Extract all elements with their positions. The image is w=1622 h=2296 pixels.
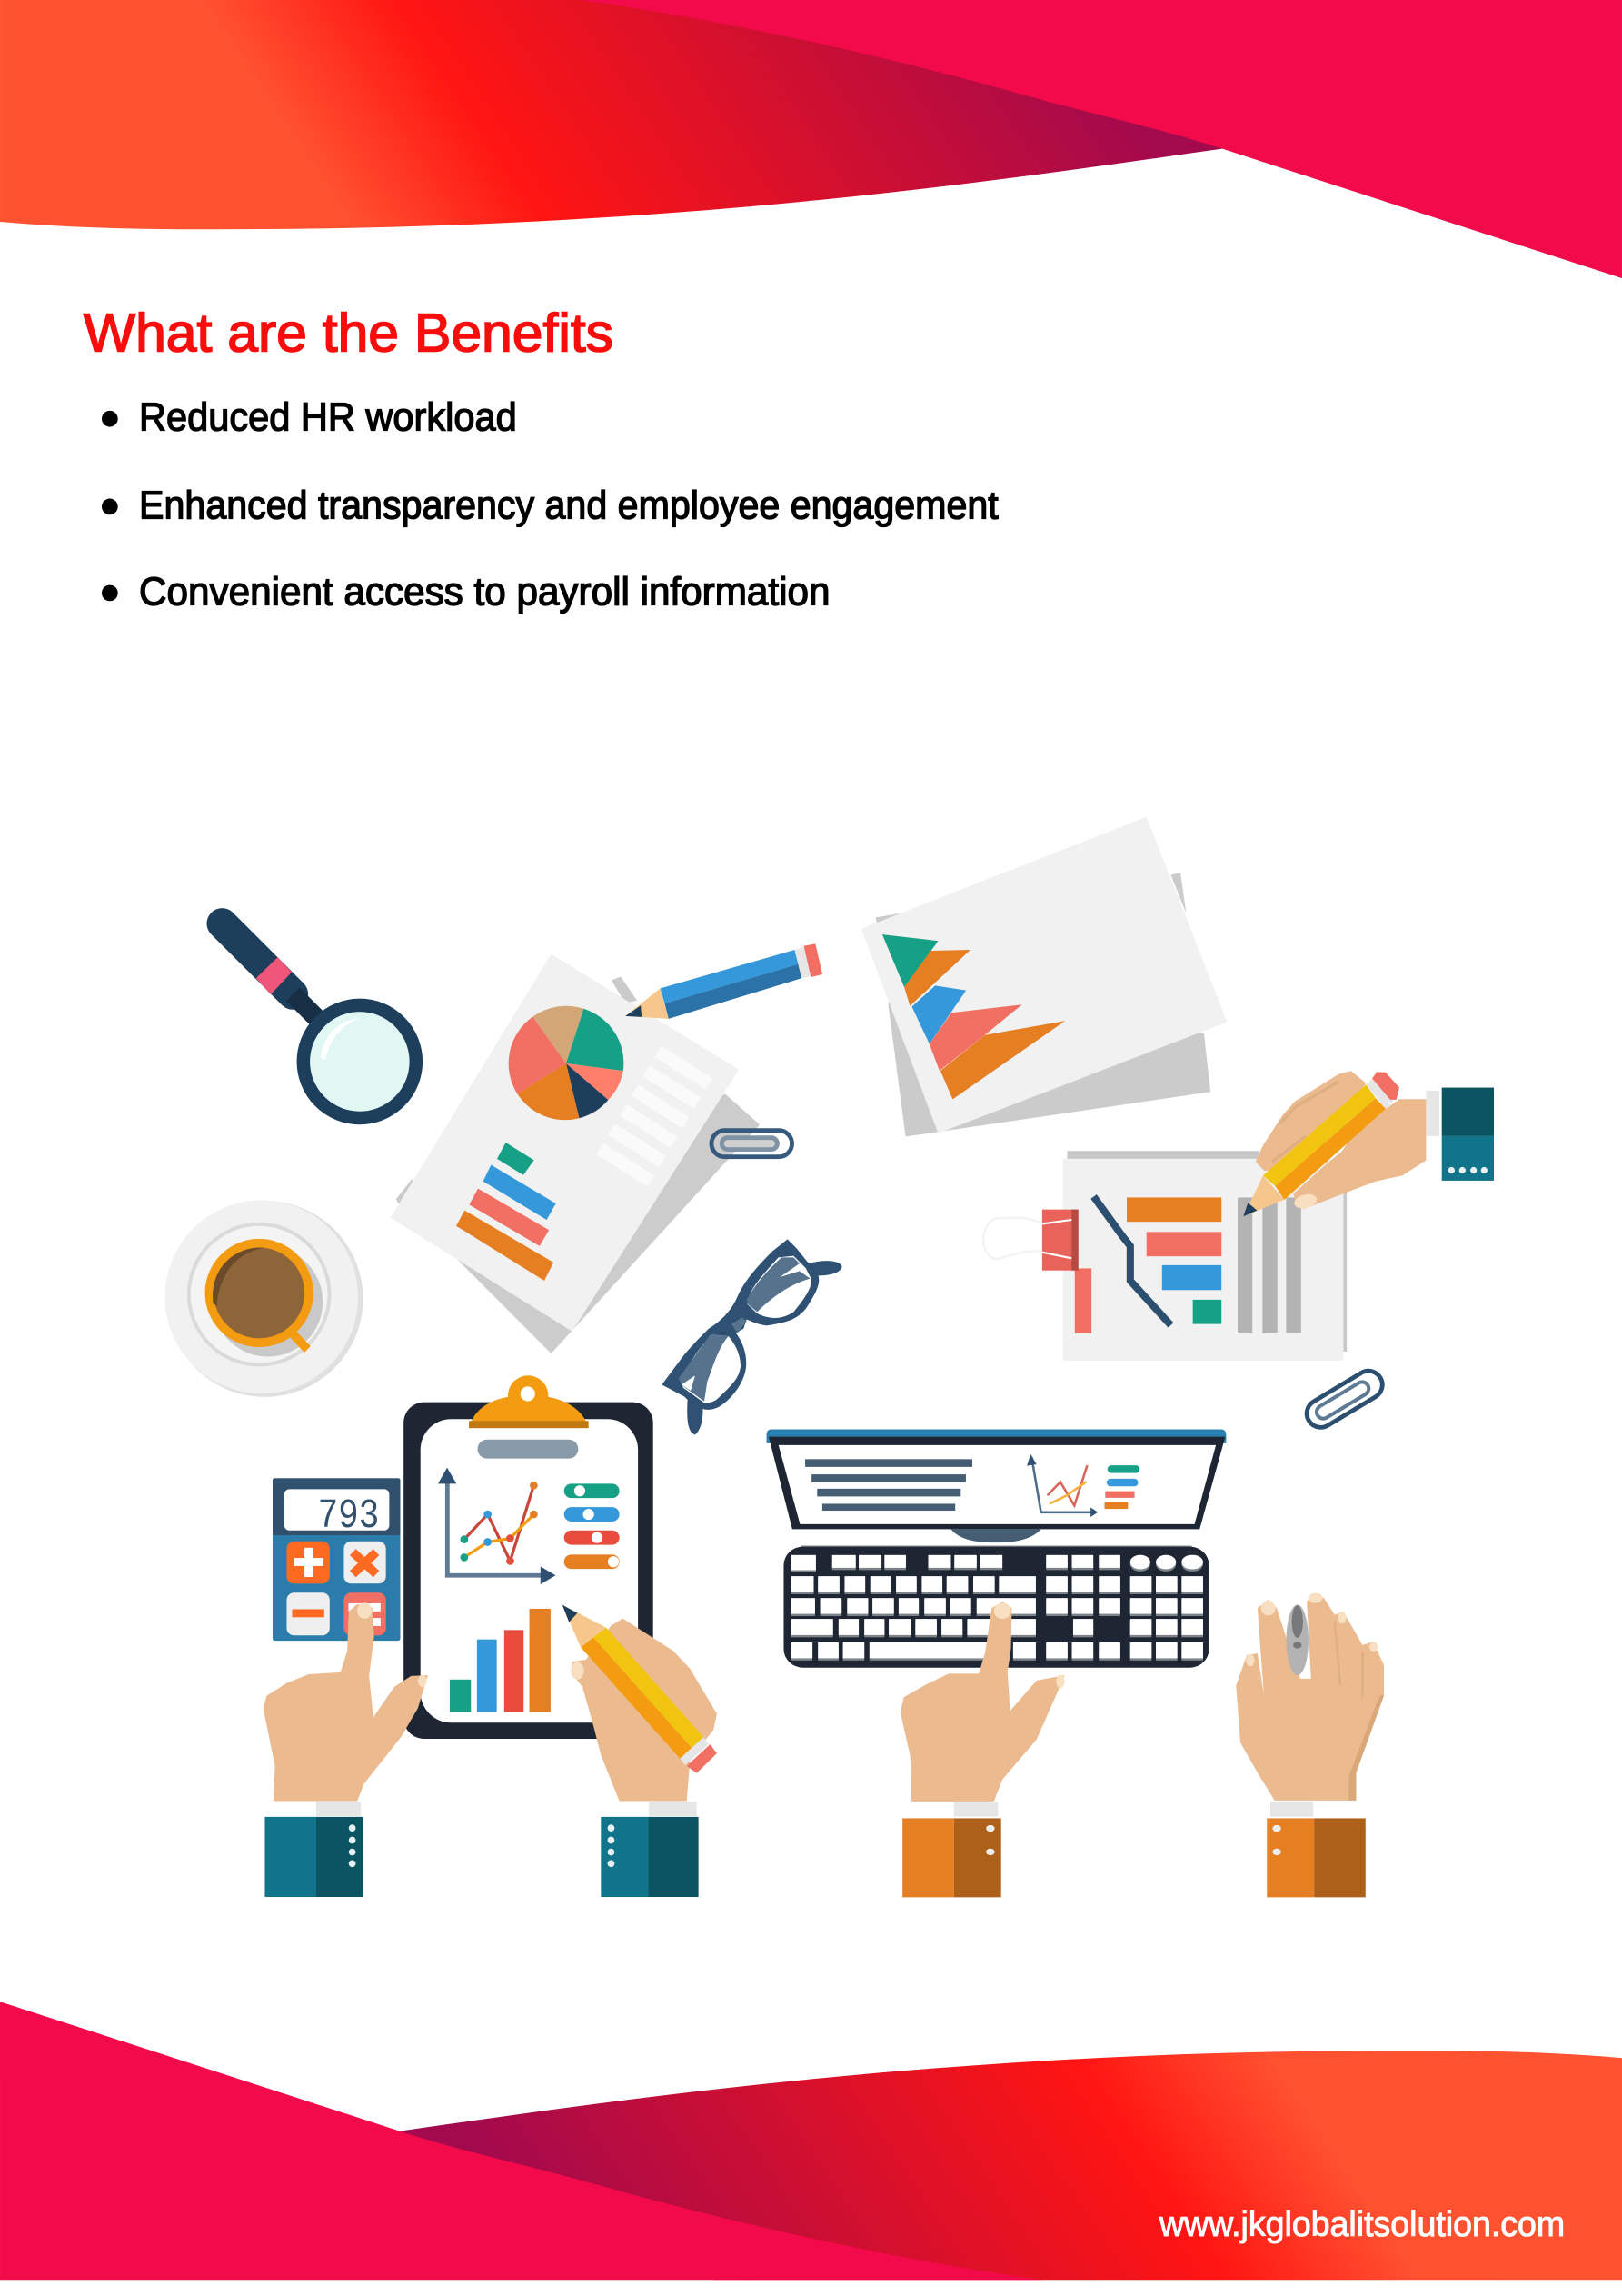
- bar stack: [456, 1143, 556, 1281]
- icon: coffee cup on saucer: [164, 1201, 363, 1397]
- text strips: [600, 1052, 709, 1182]
- paper with pie chart: [391, 954, 760, 1353]
- mouse hand: [1236, 1593, 1384, 1897]
- triangle chart: [882, 934, 1065, 1099]
- icon: blue pencil: [625, 943, 822, 1019]
- plus button: [286, 1542, 330, 1583]
- horizontal bars: [1127, 1197, 1221, 1324]
- right hand with pencil on clipboard: [562, 1605, 717, 1897]
- bullet 3: Convenient access to payroll information: [139, 570, 830, 614]
- binder clip: [983, 1210, 1091, 1333]
- paper with triangle chart: [861, 817, 1227, 1136]
- icon: glasses: [662, 1239, 842, 1434]
- left hand pressing calculator: [264, 1602, 428, 1897]
- heading: What are the Benefits: [84, 303, 613, 364]
- monitor: [767, 1429, 1226, 1542]
- keyboard and bottom right hands, zoom-space group: [783, 1545, 1384, 1897]
- screen text lines: [805, 1459, 972, 1511]
- icon: diagonal paperclip: [1301, 1366, 1388, 1433]
- clipboard with charts: [403, 1375, 653, 1739]
- paper with bars and binder clip: [983, 1151, 1347, 1361]
- icon: magnifying glass: [222, 923, 416, 1118]
- bar chart: [450, 1609, 551, 1712]
- legend pills: [564, 1483, 620, 1569]
- divide button: [343, 1592, 386, 1635]
- hand on keyboard: [901, 1602, 1065, 1897]
- keys: [791, 1555, 1203, 1658]
- screen mini chart: [1027, 1454, 1139, 1517]
- keyboard: [783, 1545, 1209, 1668]
- hand with yellow pencil, upper right: [1243, 1071, 1494, 1216]
- footer website url: www.jkglobalitsolution.com: [1159, 2205, 1565, 2244]
- calculator: [273, 1478, 400, 1641]
- line chart: [438, 1468, 555, 1584]
- bottom footer band: [0, 2002, 1622, 2280]
- trend line: [1094, 1196, 1170, 1325]
- benefits list: [102, 396, 999, 614]
- vertical bars: [1238, 1197, 1301, 1333]
- clip: [469, 1375, 589, 1428]
- icon: paperclip: [711, 1131, 792, 1157]
- bullet 2: Enhanced transparency and employee engagement: [139, 484, 999, 527]
- multiply button: [343, 1542, 386, 1583]
- top header band: [0, 0, 1622, 278]
- calculator display: 793: [318, 1492, 379, 1540]
- bullet 1: Reduced HR workload: [139, 396, 517, 440]
- minus button: [286, 1592, 330, 1635]
- pie chart: [509, 1006, 623, 1120]
